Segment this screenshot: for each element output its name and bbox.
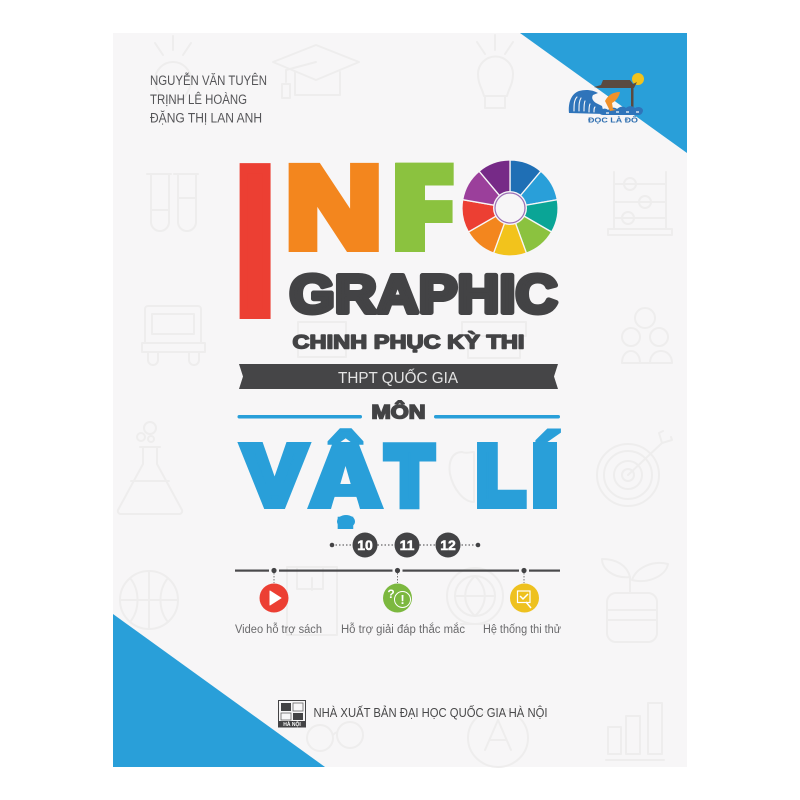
sun (632, 73, 644, 85)
book cover background (113, 33, 687, 767)
icon: abacus (608, 172, 672, 235)
letter V: V (244, 429, 304, 522)
icon: central objects behind heading (298, 322, 526, 358)
icon: publisher logo (278, 700, 306, 728)
icon: speech bubbles (383, 584, 412, 612)
letter N: N (286, 144, 382, 272)
grade badges (330, 532, 480, 558)
publisher (278, 700, 548, 728)
feature: mock exams (483, 584, 561, 636)
icon: target (597, 431, 672, 506)
feature: question support (341, 584, 465, 636)
feature: video support: Video hỗ trợ sách (235, 623, 322, 636)
title: INFO (233, 122, 558, 359)
timeline (235, 568, 560, 583)
publisher brand logo: wave, gate and fish (569, 73, 644, 124)
grade 11 (394, 532, 420, 558)
feature: video support (235, 584, 322, 636)
author name 1: NGUYỄN VĂN TUYÊN (150, 73, 267, 88)
icon: globe (447, 568, 503, 624)
icon: play (260, 584, 288, 612)
authors (150, 73, 267, 126)
grade 10 (352, 532, 378, 558)
icon: test tubes (147, 174, 198, 231)
icon: glasses (307, 722, 363, 751)
grade 12 (436, 532, 460, 558)
author name 2: TRỊNH LÊ HOÀNG (150, 92, 247, 107)
grade 11: 11 (400, 537, 415, 553)
subject heading: Mon with rules: MÔN (372, 402, 426, 424)
gate post (631, 88, 634, 107)
icon: publisher logo: HÀ NỘI (283, 720, 301, 728)
bottom left blue triangle (113, 614, 325, 767)
icon: bar chart (606, 703, 664, 760)
author name 3: ĐẶNG THỊ LAN ANH (150, 110, 262, 126)
publisher: NHÀ XUẤT BẢN ĐẠI HỌC QUỐC GIA HÀ NỘI (314, 705, 548, 720)
letter O: colour wheel (462, 160, 558, 256)
icon: document (287, 567, 337, 635)
icon: left light bulb (155, 36, 191, 100)
icon: graduation cap (273, 45, 359, 98)
letter I: I (233, 122, 278, 359)
icon: right light bulb (477, 35, 513, 108)
grade 10: 10 (357, 537, 373, 553)
icon: checklist (510, 584, 539, 612)
title: GRAPHIC: GRAPHIC (290, 264, 558, 324)
icon: flask (118, 422, 182, 514)
icon: speech bubbles: ! (400, 592, 405, 607)
fish (605, 92, 620, 111)
subtitle: chinh phuc ky thi: CHINH PHỤC KỲ THI (292, 332, 524, 354)
subject heading: Mon with rules (238, 402, 560, 424)
icon: people group (622, 308, 672, 363)
top right blue triangle (520, 33, 687, 153)
gate roof (594, 80, 637, 88)
icon: plant pot (602, 559, 668, 642)
ribbon: THPT Quoc Gia: THPT QUỐC GIA (338, 367, 458, 387)
logo caption: ĐỌC LÀ ĐÔ (588, 116, 638, 124)
letter T: T (386, 429, 432, 522)
feature: question support: Hỗ trợ giải đáp thắc mắc (341, 623, 465, 636)
letter L: L (476, 429, 524, 522)
icon: letter A badge (468, 709, 528, 767)
letter I with acute: Í (532, 430, 560, 526)
letter A with circumflex and dot: Ậ (312, 429, 378, 531)
icon: speech bubbles: ? (387, 587, 395, 601)
waves (569, 90, 643, 115)
grade 12: 12 (440, 537, 456, 553)
letter F: F (393, 144, 453, 272)
subject title: Vat Li (244, 429, 560, 531)
ribbon: THPT Quoc Gia (239, 364, 558, 389)
icon: basketball (120, 571, 178, 629)
icon: apple (450, 452, 474, 502)
feature: mock exams: Hệ thống thi thử (483, 624, 561, 636)
icon: car (142, 306, 205, 365)
background icons (118, 35, 672, 767)
